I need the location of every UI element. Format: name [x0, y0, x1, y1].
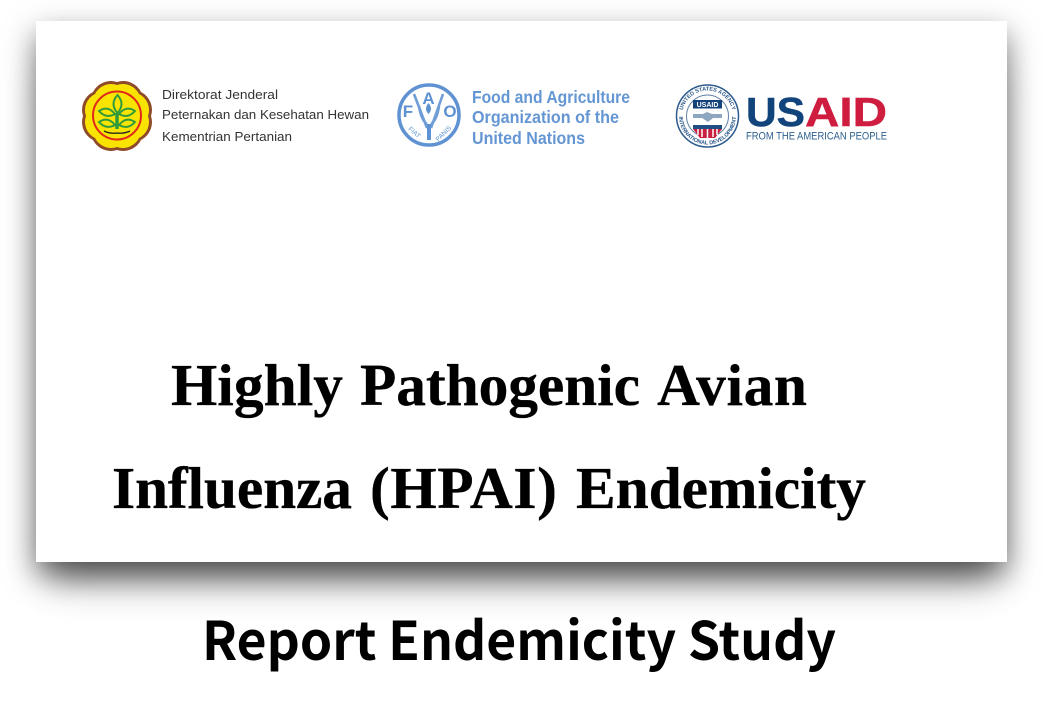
title: Highly — [171, 352, 343, 418]
icon: FAO wheat roundel — [399, 85, 459, 145]
icon: FAO wheat roundel: F — [403, 102, 413, 121]
title — [112, 352, 866, 521]
text: USAID wordmark — [746, 89, 887, 135]
icon: USAID seal: USAID — [697, 102, 718, 109]
icon: USAID seal: INTERNATIONAL DEVELOPMENT — [679, 116, 736, 144]
text: USAID wordmark: AID — [805, 89, 887, 135]
icon: FAO wheat roundel: FIAT — [407, 126, 421, 140]
title: Pathogenic — [360, 352, 640, 418]
title: Influenza — [112, 455, 352, 521]
text: FAO name: Food and Agriculture — [472, 87, 630, 107]
icon: USAID seal: UNITED STATES AGENCY — [679, 86, 736, 110]
title: Endemicity — [576, 455, 866, 521]
icon: USAID seal — [676, 84, 740, 148]
icon: FAO wheat roundel: A — [422, 89, 435, 108]
icon: FAO wheat roundel: O — [443, 102, 457, 121]
text: FAO name — [472, 87, 630, 148]
title: Avian — [657, 352, 807, 418]
text: USAID wordmark: US — [746, 89, 805, 135]
panel: white cover card with drop shadow — [36, 21, 1007, 562]
title: (HPAI) — [370, 455, 557, 521]
logo: Directorate General of Livestock — [82, 81, 369, 151]
text: organisation name — [162, 88, 369, 144]
icon: FAO wheat roundel: PANIS — [435, 124, 454, 143]
text: FAO name: Organization of the — [472, 107, 619, 127]
subtitle: Report Endemicity Study — [202, 600, 836, 676]
text: FAO name: United Nations — [472, 128, 585, 148]
logo: FAO — [399, 85, 630, 148]
text: organisation name: Peternakan dan Kesehatan Hewan — [162, 108, 369, 122]
text: organisation name: Kementrian Pertanian — [162, 130, 292, 144]
logo: USAID — [676, 84, 887, 148]
text: organisation name: Direktorat Jenderal — [162, 88, 278, 102]
text: USAID tagline: FROM THE AMERICAN PEOPLE — [746, 130, 887, 142]
icon: scalloped ministry emblem — [82, 81, 152, 151]
